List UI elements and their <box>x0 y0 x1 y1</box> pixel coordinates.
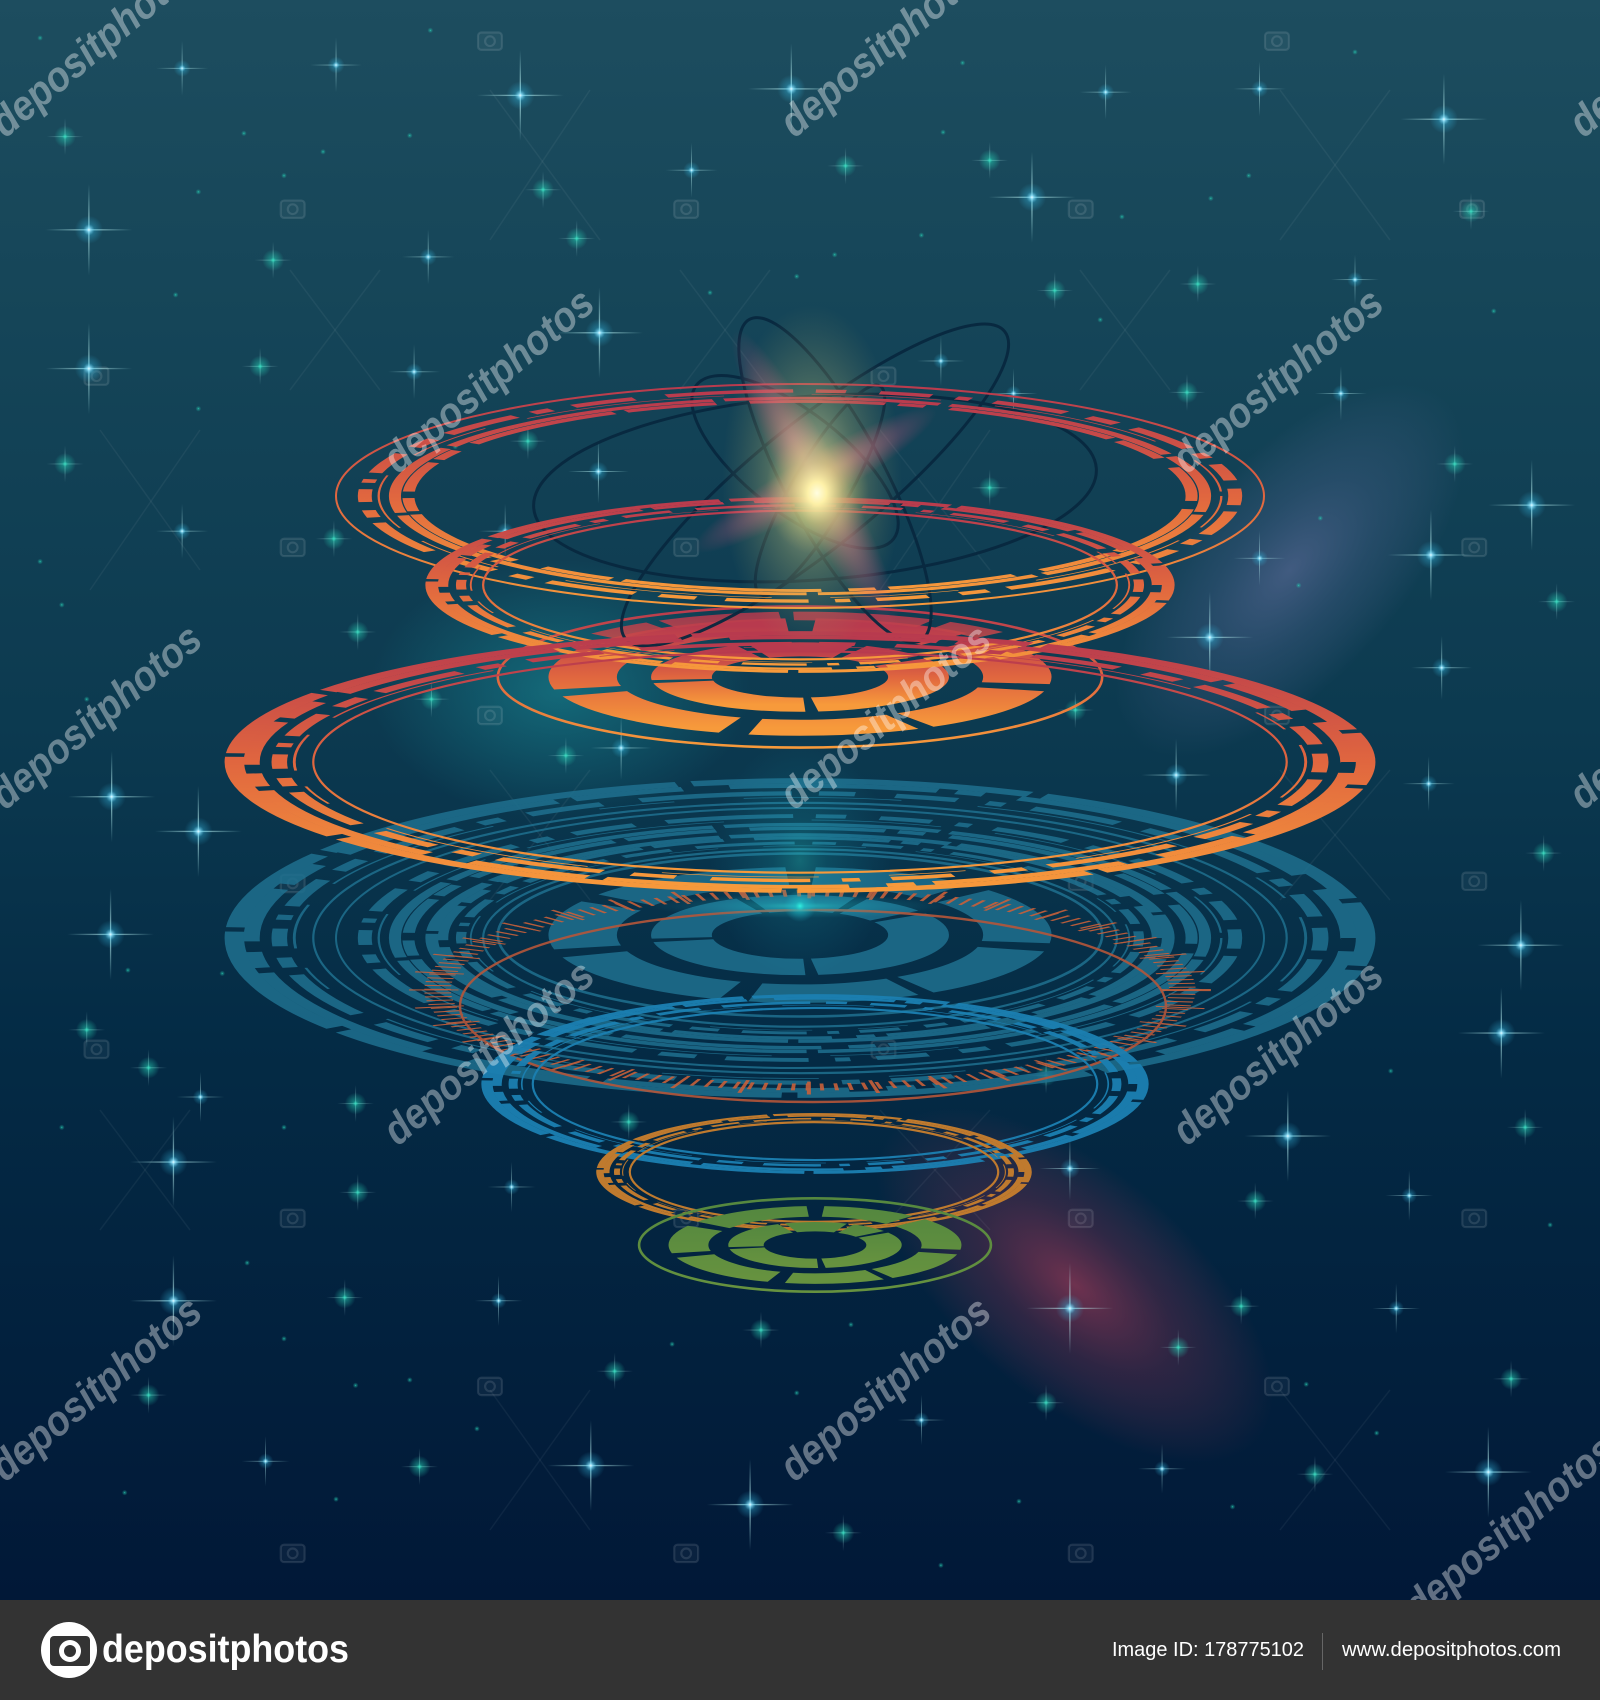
reflection: blue ring stack <box>234 781 1366 1095</box>
disc: green <box>639 1198 991 1292</box>
glow: teal haze <box>370 560 750 820</box>
faint line pattern <box>90 90 1390 1530</box>
watermarks: depositphotos <box>373 951 603 1154</box>
camera watermark icons <box>85 33 1486 1562</box>
watermarks: depositphotos <box>373 278 603 482</box>
nebula: blue haze <box>1054 325 1526 815</box>
ring: bright blue <box>487 996 1143 1172</box>
ring: middle <box>432 499 1168 671</box>
watermarks: depositphotos <box>1163 278 1392 482</box>
central star flare <box>682 305 948 655</box>
glow: teal flare on reflection <box>650 740 950 980</box>
watermarks: depositphotos <box>1163 951 1392 1154</box>
ring: small amber <box>600 1114 1028 1230</box>
ring: large <box>234 633 1366 891</box>
website: www.depositphotos.com <box>1341 1639 1561 1661</box>
reflection: tick ring <box>434 892 1186 1102</box>
footer logo text: depositphotos <box>102 1628 349 1671</box>
disc: orange <box>498 606 1102 748</box>
footer bar <box>0 1600 1600 1700</box>
footer logo icon <box>41 1622 97 1678</box>
image id: Image ID: 178775102 <box>1112 1639 1304 1661</box>
nebula: pink haze <box>817 1043 1333 1527</box>
ring: top <box>336 384 1264 608</box>
watermarks: depositphotos <box>770 1287 1000 1490</box>
atom orbits <box>527 283 1103 687</box>
watermarks: depositphotos <box>770 614 1000 818</box>
